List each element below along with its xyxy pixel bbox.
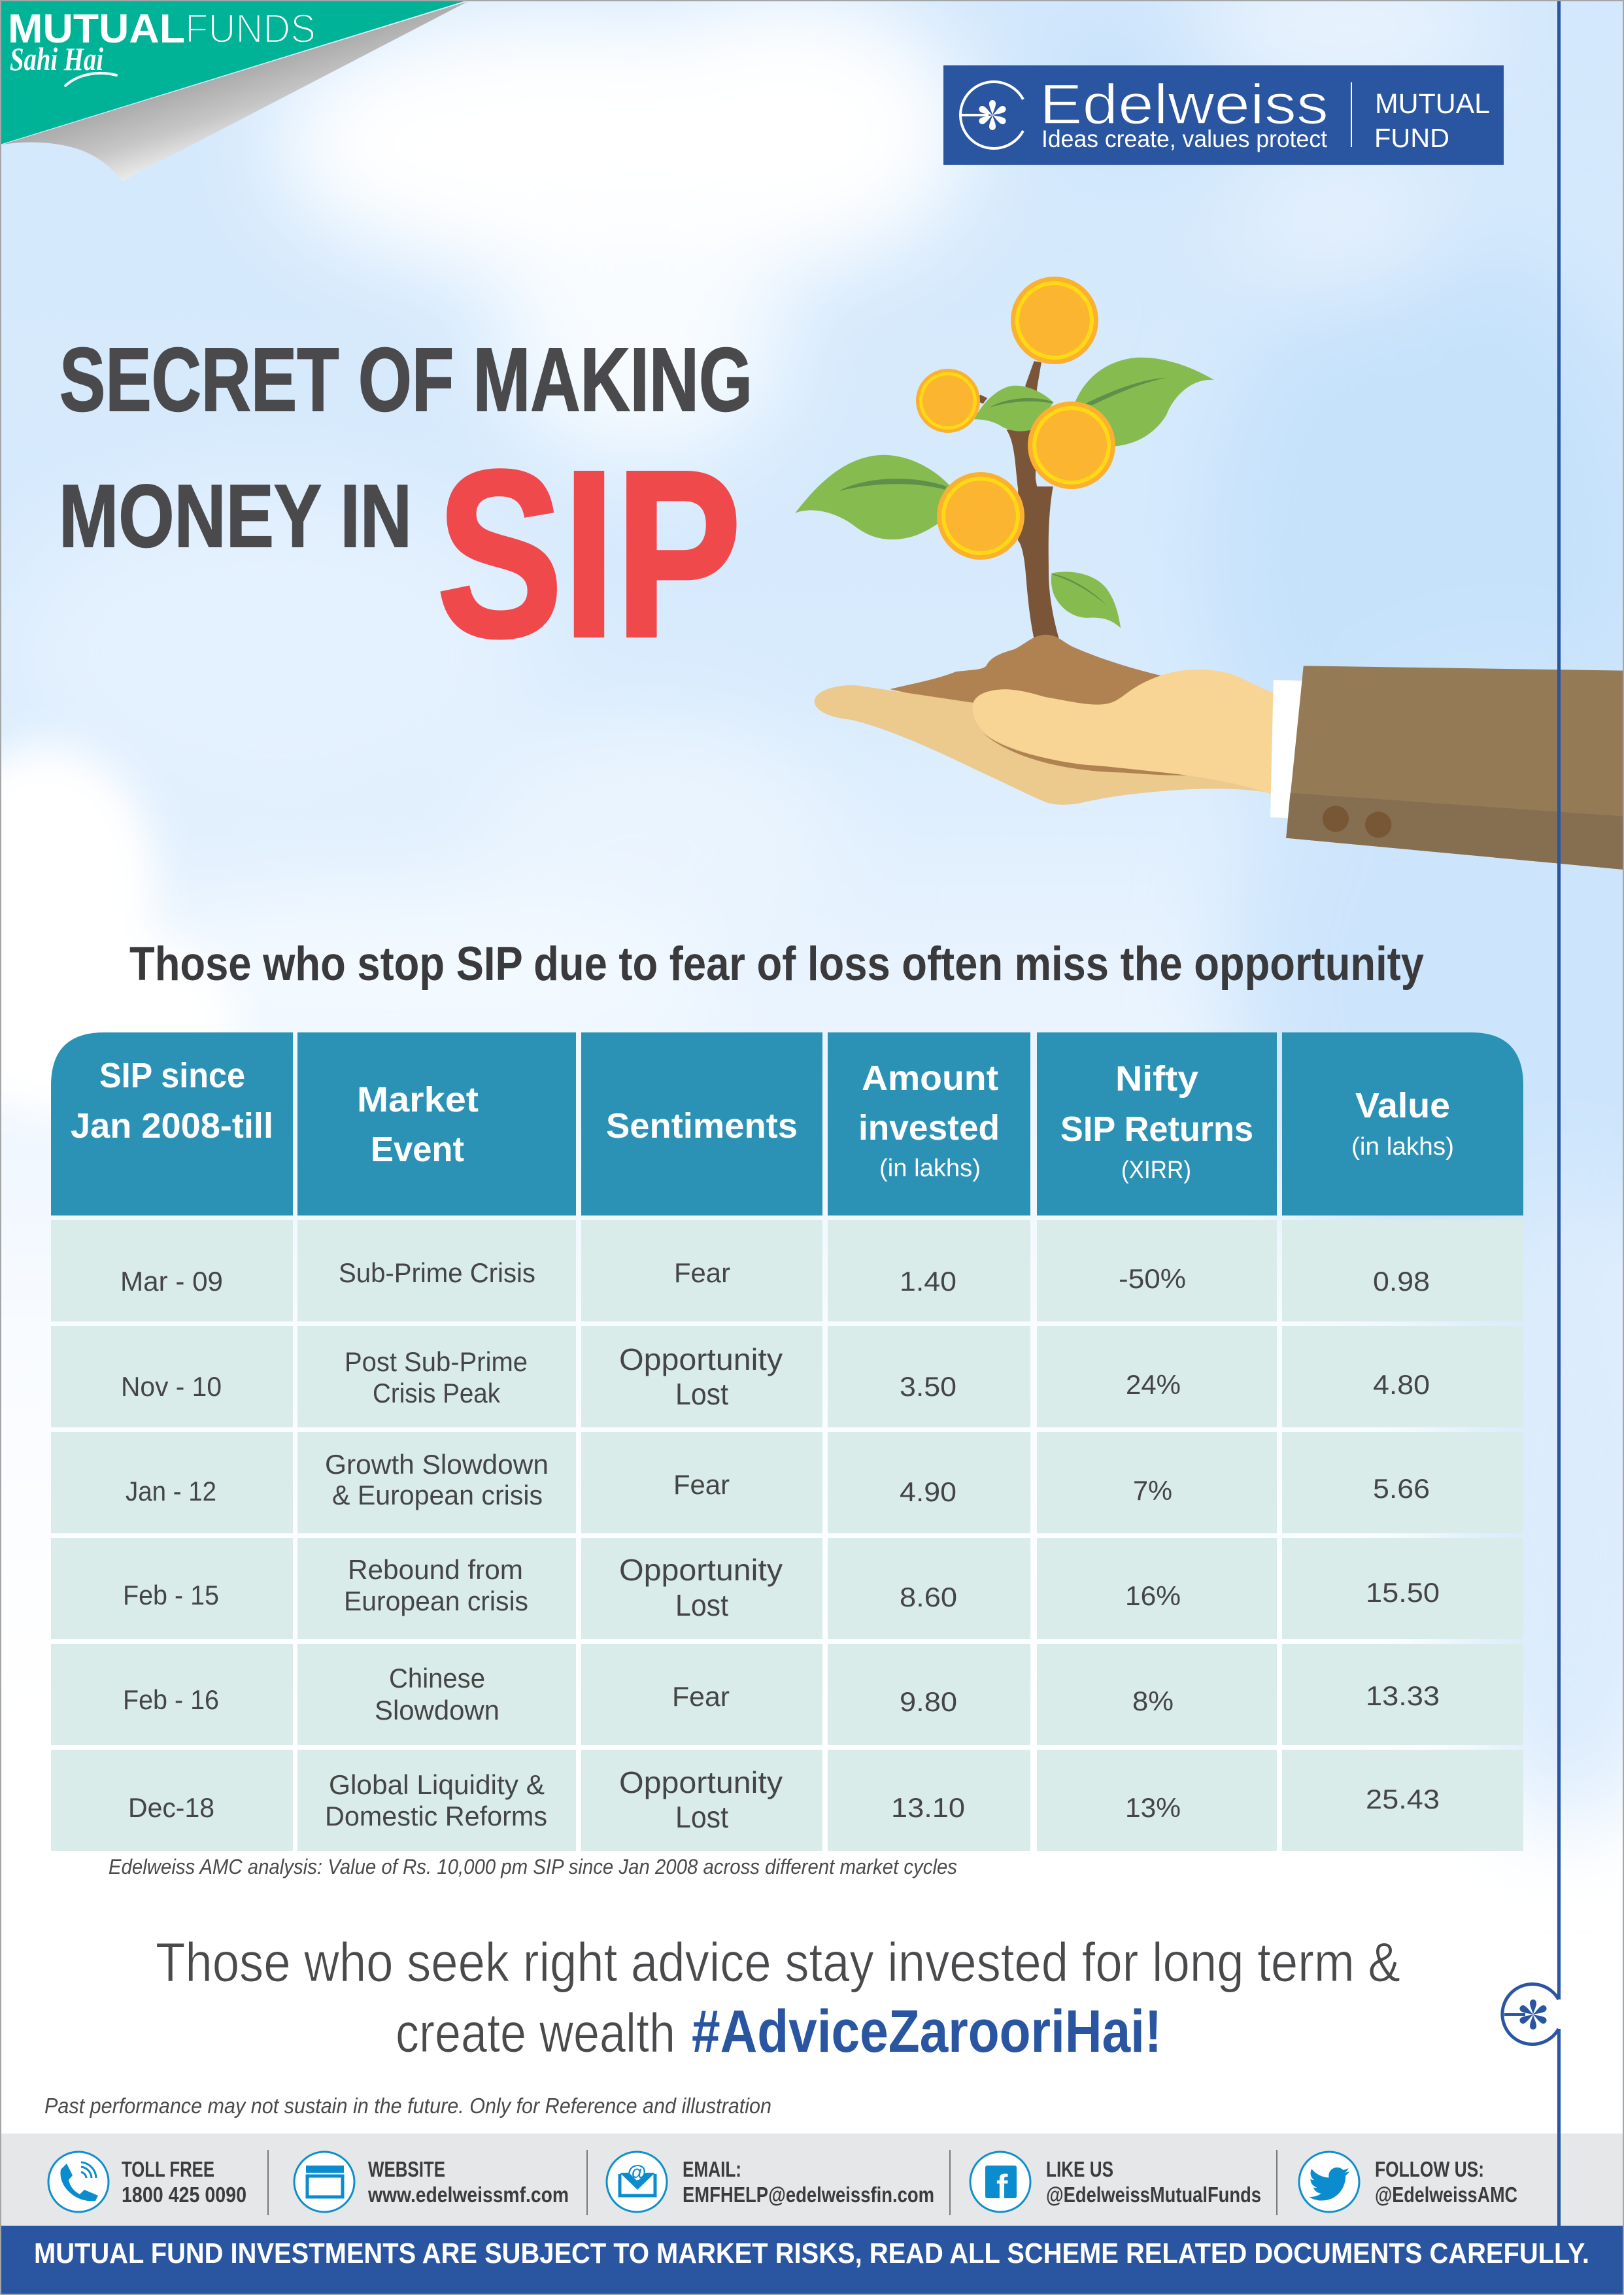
- table: [51, 1032, 1523, 1851]
- table row: Jan - 12: Growth Slowdown: [325, 1449, 549, 1480]
- Edelweiss Mutual Fund logo: [943, 65, 1504, 165]
- table header row: invested: [858, 1108, 1000, 1148]
- table row: Mar - 09: -50%: [1119, 1263, 1186, 1294]
- table row: Dec-18: Global Liquidity &: [329, 1769, 545, 1800]
- contact: facebook: f: [996, 2168, 1008, 2206]
- table row: Feb - 15: Opportunity: [619, 1553, 783, 1587]
- table header row: (XIRR): [1121, 1157, 1191, 1184]
- table header row: Jan 2008-till: [71, 1106, 273, 1146]
- table header row: [51, 1032, 1523, 1216]
- table row: Jan - 12: & European crisis: [332, 1480, 543, 1510]
- table row: Jan - 12: 5.66: [1373, 1473, 1430, 1504]
- table row: Dec-18: Opportunity: [619, 1765, 783, 1799]
- table row: Dec-18: Dec-18: [128, 1792, 214, 1823]
- Edelweiss Mutual Fund logo: MUTUAL: [1375, 88, 1490, 120]
- table header row: (in lakhs): [1351, 1133, 1454, 1161]
- contact: twitter: [1299, 2152, 1517, 2212]
- table row: Feb - 15: 16%: [1125, 1580, 1181, 1611]
- table header row: (in lakhs): [879, 1155, 981, 1182]
- table row: Nov - 10: [51, 1326, 1523, 1427]
- Edelweiss Mutual Fund logo: FUND: [1374, 123, 1449, 153]
- table row: Nov - 10: 24%: [1126, 1369, 1181, 1400]
- table row: Feb - 16: Fear: [672, 1681, 730, 1712]
- table row: Nov - 10: Lost: [675, 1377, 728, 1411]
- disclaimer: Past performance may not sustain in the future. Only for Reference and illustration: [44, 2094, 771, 2118]
- table header row: SIP since: [99, 1056, 245, 1095]
- title: [59, 330, 753, 686]
- table row: Nov - 10: 4.80: [1373, 1369, 1430, 1400]
- table row: Feb - 16: Slowdown: [375, 1695, 499, 1726]
- contact footer: [0, 2134, 1624, 2226]
- table row: Dec-18: 25.43: [1366, 1784, 1440, 1814]
- coins: [916, 277, 1115, 560]
- table row: Feb - 15: 15.50: [1366, 1577, 1440, 1608]
- table row: Mar - 09: Mar - 09: [120, 1266, 223, 1297]
- ribbon wordmark: [8, 7, 316, 86]
- ribbon wordmark: FUNDS: [185, 7, 316, 52]
- Edelweiss Mutual Fund logo: Ideas create, values protect: [1041, 126, 1328, 152]
- table row: Jan - 12: Fear: [673, 1469, 730, 1500]
- table header row: Value: [1355, 1086, 1450, 1125]
- contact: email: [607, 2152, 934, 2212]
- contact: toll free: [48, 2152, 246, 2212]
- table header row: Sentiments: [606, 1106, 798, 1146]
- table row: Feb - 16: 8%: [1132, 1686, 1174, 1716]
- vertical blue line with emblem: [1502, 0, 1561, 2226]
- ribbon wordmark: MUTUAL: [8, 7, 185, 52]
- table row: Feb - 16: [51, 1644, 1523, 1745]
- page curl: [3, 1, 468, 181]
- hand and sleeve: [815, 635, 1624, 870]
- table row: Jan - 12: 4.90: [900, 1476, 956, 1507]
- table row: Feb - 15: [51, 1538, 1523, 1639]
- closing message: create wealth: [396, 2002, 675, 2064]
- contact: toll free: 1800 425 0090: [122, 2183, 246, 2207]
- table row: Feb - 15: Rebound from: [348, 1554, 523, 1585]
- closing message: [156, 1931, 1400, 2065]
- table row: Dec-18: [51, 1750, 1523, 1851]
- table row: Feb - 15: Feb - 15: [123, 1580, 219, 1610]
- table row: Feb - 16: 13.33: [1366, 1680, 1440, 1711]
- table row: Dec-18: 13.10: [891, 1792, 965, 1823]
- table row: Mar - 09: [51, 1220, 1523, 1321]
- table row: Jan - 12: Jan - 12: [126, 1476, 216, 1506]
- table row: Feb - 16: Feb - 16: [123, 1684, 219, 1715]
- contact: website: www.edelweissmf.com: [367, 2183, 569, 2207]
- table row: Nov - 10: Nov - 10: [121, 1371, 222, 1402]
- table header row: Nifty: [1115, 1059, 1198, 1098]
- table row: Nov - 10: Opportunity: [619, 1342, 783, 1376]
- table row: Feb - 15: 8.60: [900, 1582, 957, 1612]
- contact: facebook: [970, 2152, 1261, 2212]
- table header row: SIP Returns: [1060, 1110, 1253, 1149]
- table header row: Event: [371, 1130, 464, 1169]
- contact: facebook: LIKE US: [1046, 2157, 1113, 2181]
- table row: Jan - 12: [51, 1432, 1523, 1533]
- table row: Dec-18: Lost: [675, 1800, 728, 1834]
- statutory warning bar: [0, 2226, 1624, 2294]
- table row: Nov - 10: Post Sub-Prime: [345, 1346, 528, 1377]
- contact: twitter: @EdelweissAMC: [1375, 2183, 1517, 2207]
- table row: Feb - 15: Lost: [675, 1588, 728, 1622]
- table header row: Market: [357, 1080, 479, 1119]
- table row: Feb - 16: Chinese: [389, 1663, 485, 1693]
- contact: twitter: FOLLOW US:: [1375, 2157, 1484, 2181]
- table heading: Those who stop SIP due to fear of loss often miss the opportunity: [129, 938, 1424, 991]
- contact: email: EMAIL:: [683, 2157, 741, 2181]
- Edelweiss Mutual Fund logo: Edelweiss: [1040, 73, 1328, 136]
- title: MONEY IN: [59, 466, 412, 566]
- illustration: money plant on hand: [795, 277, 1624, 870]
- title: SECRET OF MAKING: [59, 330, 753, 430]
- contact: email: EMFHELP@edelweissfin.com: [683, 2183, 934, 2207]
- table footnote: Edelweiss AMC analysis: Value of Rs. 10,000 pm SIP since Jan 2008 across different market cycles: [109, 1855, 957, 1878]
- table header row: Amount: [862, 1059, 998, 1098]
- contact: website: WEBSITE: [368, 2157, 445, 2181]
- closing message: Those who seek right advice stay invested for long term &: [156, 1931, 1400, 1993]
- title: SIP: [437, 421, 741, 686]
- table row: Nov - 10: Crisis Peak: [373, 1378, 501, 1408]
- table row: Mar - 09: Sub-Prime Crisis: [339, 1257, 535, 1288]
- table row: Mar - 09: 1.40: [900, 1266, 956, 1297]
- table row: Feb - 15: European crisis: [344, 1586, 528, 1616]
- table row: Nov - 10: 3.50: [900, 1371, 956, 1402]
- contact: toll free: TOLL FREE: [122, 2157, 214, 2181]
- table row: Dec-18: Domestic Reforms: [325, 1801, 547, 1831]
- closing message: #AdviceZarooriHai!: [692, 1998, 1162, 2065]
- contact: facebook: @EdelweissMutualFunds: [1046, 2183, 1261, 2207]
- contact: email: @: [627, 2162, 647, 2183]
- contact: website: [294, 2152, 569, 2212]
- table row: Jan - 12: 7%: [1133, 1475, 1172, 1506]
- table row: Mar - 09: 0.98: [1373, 1266, 1430, 1297]
- corner ribbon: Mutual Funds Sahi Hai: [0, 0, 468, 181]
- table row: Mar - 09: Fear: [674, 1257, 730, 1288]
- plant: [795, 358, 1214, 640]
- ribbon wordmark: Sahi Hai: [10, 41, 103, 77]
- table row: Feb - 16: 9.80: [900, 1686, 957, 1717]
- logo emblem: [960, 82, 1023, 148]
- table row: Dec-18: 13%: [1125, 1792, 1181, 1823]
